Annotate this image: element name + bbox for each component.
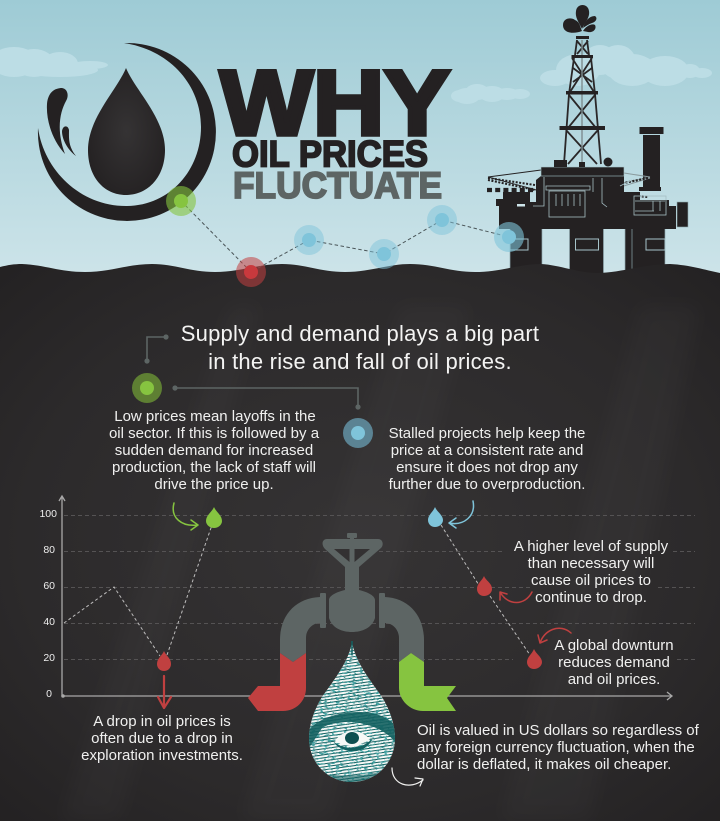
text: drop in oil prices: exploration investments.	[81, 747, 243, 764]
rig deck	[496, 158, 676, 229]
axis labels: 80	[43, 544, 55, 556]
arrow: red mid	[500, 592, 532, 602]
arrow: blue	[449, 501, 473, 528]
left red outlet	[248, 653, 306, 711]
left pipe	[280, 597, 320, 662]
line chart	[39, 496, 695, 700]
drop: green high	[206, 507, 222, 528]
green dot	[132, 373, 162, 403]
large drop	[88, 68, 165, 195]
title: OIL PRICES	[232, 134, 428, 174]
marker: blue 2	[369, 239, 399, 269]
heading: Supply and demand plays a big part	[181, 321, 539, 346]
text: low prices: production, the lack of staff will	[112, 459, 316, 476]
arrow: red low	[538, 628, 571, 643]
splash	[47, 88, 68, 154]
axis labels: 0	[46, 688, 52, 700]
right pipe	[385, 597, 424, 662]
title	[220, 52, 450, 206]
gusher	[563, 5, 596, 33]
right green outlet	[399, 653, 456, 711]
blue dot	[343, 418, 373, 448]
crescent	[38, 43, 216, 221]
text: global downturn: A global downturn	[554, 637, 674, 654]
text: US dollars: dollar is deflated, it makes oil cheaper.	[417, 756, 671, 773]
text: global downturn: and oil prices.	[568, 671, 660, 688]
hand-drawn arrows	[158, 501, 571, 786]
axis labels: 60	[43, 580, 55, 592]
text: stalled projects: ensure it does not drop any	[396, 459, 578, 476]
drop: blue high	[428, 507, 443, 527]
arrow: white	[392, 768, 423, 786]
deck outlines	[533, 177, 666, 217]
text: higher supply: than necessary will	[528, 555, 654, 572]
text: US dollars: Oil is valued in US dollars so regardless of	[417, 722, 700, 739]
text: low prices: sudden demand for increased	[115, 442, 313, 459]
axis labels: 100	[39, 508, 57, 520]
sky background	[0, 0, 720, 290]
marker: red	[236, 257, 266, 287]
drop: red low	[157, 651, 171, 671]
title: FLUCTUATE	[233, 165, 442, 206]
arrow: red down	[158, 676, 171, 708]
marker: blue 4	[494, 222, 524, 252]
text: US dollars: any foreign currency fluctuation, when the	[417, 739, 695, 756]
title: WHY	[220, 52, 450, 154]
axis labels	[39, 508, 57, 700]
derrick platforms	[560, 36, 605, 130]
text: stalled projects: price at a consistent rate and	[391, 442, 583, 459]
marker: green	[166, 186, 196, 216]
text: higher supply: continue to drop.	[535, 589, 647, 606]
axis labels: 40	[43, 616, 55, 628]
text: low prices: Low prices mean layoffs in the	[114, 408, 316, 425]
text: low prices: drive the price up.	[154, 476, 274, 493]
text: global downturn: reduces demand	[558, 654, 670, 671]
marker: blue 1	[294, 225, 324, 255]
clouds	[0, 45, 712, 104]
text: low prices: oil sector. If this is followed by a	[109, 425, 320, 442]
text: drop in oil prices: often due to a drop in	[91, 730, 233, 747]
dark oil body with wavy surface	[0, 264, 720, 821]
text: stalled projects: Stalled projects help keep the	[389, 425, 585, 442]
drop: red mid	[477, 576, 492, 596]
smoke stack	[639, 127, 688, 227]
connector lines and callout dots	[132, 334, 373, 448]
chalk texture streaks	[60, 305, 700, 821]
oil drop logo	[38, 43, 216, 221]
dollar eye drop	[309, 644, 395, 782]
arrow: green	[173, 503, 198, 530]
text: stalled projects: further due to overproduction.	[389, 476, 585, 493]
text: higher supply: cause oil prices to	[531, 572, 651, 589]
drop: red low right	[527, 649, 542, 669]
derrick tower	[564, 40, 601, 166]
text: higher supply: A higher level of supply	[514, 538, 669, 555]
axis labels: 20	[43, 652, 55, 664]
marker: blue 3	[427, 205, 457, 235]
heading: in the rise and fall of oil prices.	[208, 349, 512, 374]
axes	[59, 496, 672, 700]
rig legs	[510, 228, 665, 276]
grid lines	[64, 516, 695, 660]
price line with markers	[166, 186, 524, 287]
drop tip	[351, 641, 353, 655]
valve	[280, 533, 424, 662]
crane booms	[488, 170, 650, 197]
text: drop in oil prices: A drop in oil prices is	[93, 713, 231, 730]
dashed data line	[64, 525, 530, 656]
heading	[181, 321, 539, 374]
flanges	[320, 593, 326, 628]
hazard stripe	[487, 188, 543, 192]
pipe and valve	[248, 533, 456, 711]
oil rig	[487, 5, 688, 276]
